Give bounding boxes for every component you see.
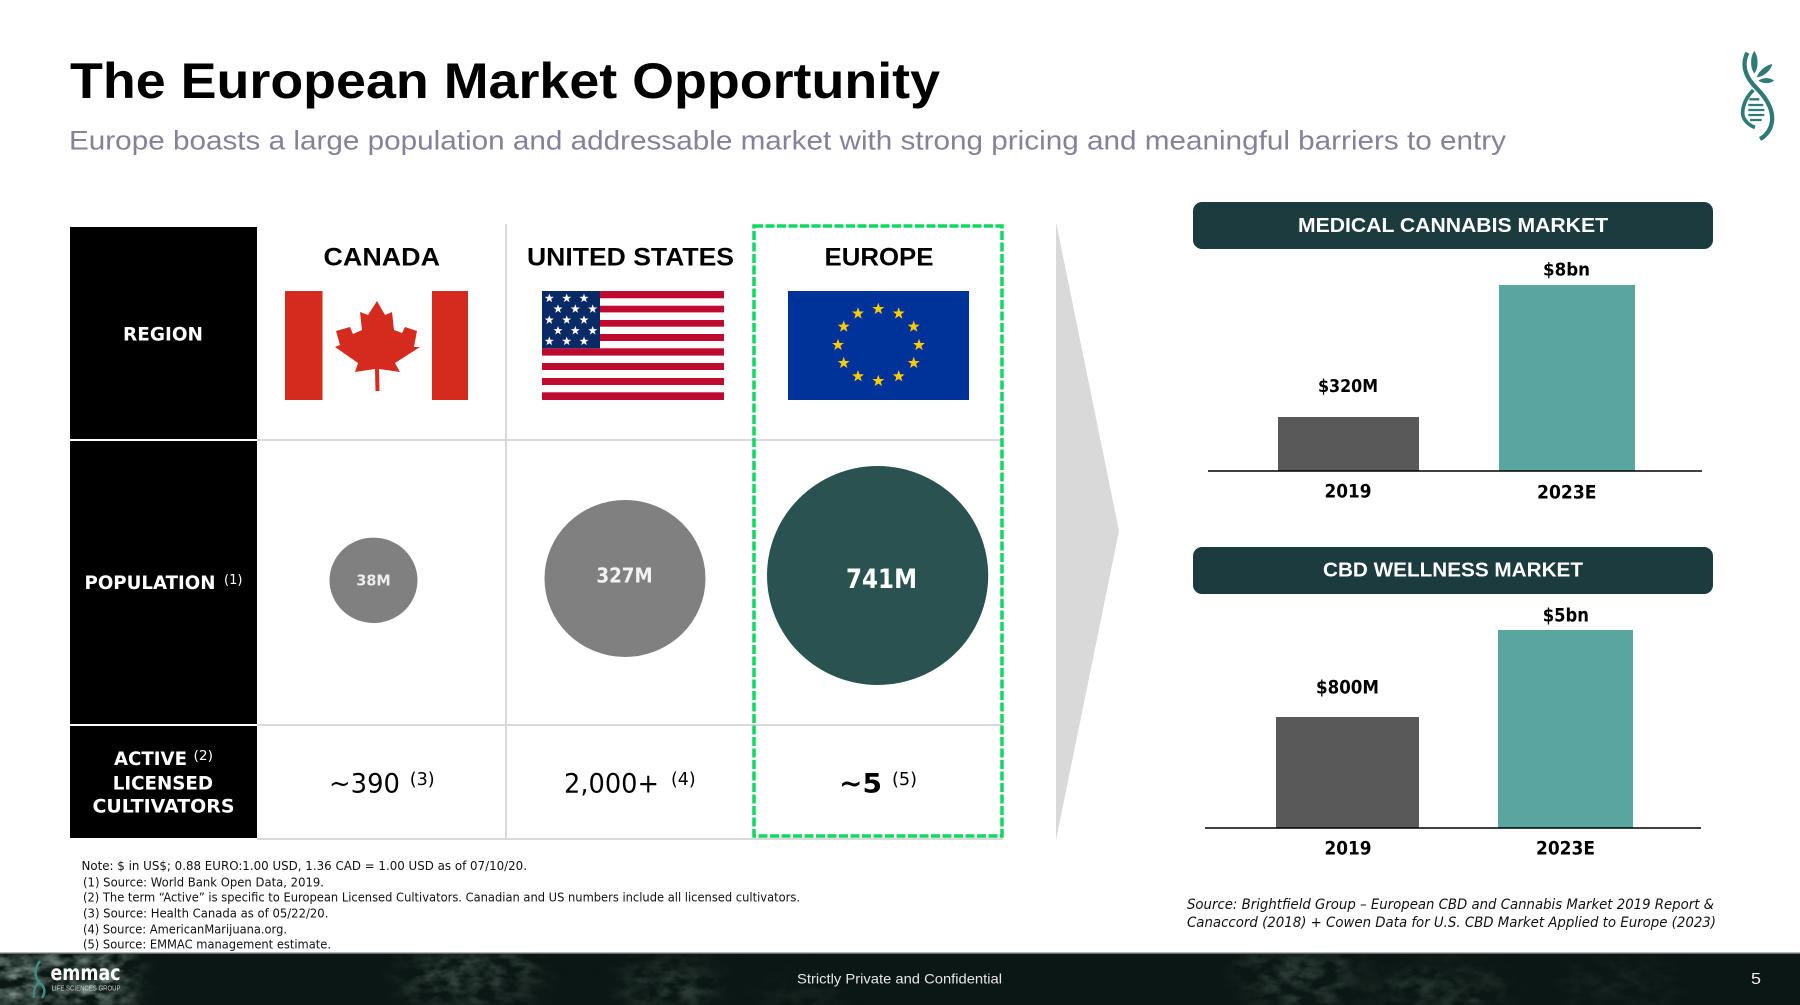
bubble: United States population xyxy=(544,500,706,657)
panel: comparison table xyxy=(70,224,1003,839)
bar chart: medical cannabis xyxy=(1208,260,1702,504)
value: Canada cultivators: ~390 xyxy=(329,769,400,800)
value: Canada cultivators: (3) xyxy=(410,769,435,790)
bubble: Europe population xyxy=(767,466,988,685)
bar chart: medical cannabis: 2023E xyxy=(1537,482,1596,504)
icon: European Union flag xyxy=(788,291,969,400)
row label: region: REGION xyxy=(123,324,203,346)
value: Europe cultivators: (5) xyxy=(892,769,917,790)
panel: CBD wellness market xyxy=(1193,547,1713,860)
footnotes: (4) Source: AmericanMarijuana.org. xyxy=(83,922,287,937)
page number: 5 xyxy=(1751,971,1761,988)
footnotes: (2) The term “Active” is specific to European Licensed Cultivators. Canadian and US numbers include all licensed cultivators. xyxy=(83,890,800,905)
heading: medical cannabis market: MEDICAL CANNABIS MARKET xyxy=(1298,215,1608,237)
icon: emmac DNA leaf logo xyxy=(1743,51,1774,139)
value: United States cultivators: 2,000+ xyxy=(564,769,659,800)
footer logo: emmac xyxy=(34,961,121,998)
source note: Source: Brightfield Group – European CBD and Cannabis Market 2019 Report & xyxy=(1187,897,1714,913)
bar chart: CBD wellness xyxy=(1205,605,1701,860)
heading: CBD wellness market: CBD WELLNESS MARKET xyxy=(1323,560,1583,582)
bar chart: medical cannabis: 2019 xyxy=(1324,480,1372,502)
bar chart: CBD wellness: $800M xyxy=(1316,677,1379,699)
footer band xyxy=(0,952,1800,1005)
row label: active licensed cultivators: CULTIVATORS xyxy=(92,795,234,817)
column heading: United States: UNITED STATES xyxy=(527,244,734,272)
row label: active licensed cultivators: LICENSED xyxy=(113,772,213,794)
row label: population: POPULATION xyxy=(84,572,216,594)
footnotes: (1) Source: World Bank Open Data, 2019. xyxy=(83,875,324,890)
arrow: grey chevron pointing to markets xyxy=(1056,222,1119,840)
row label: region xyxy=(70,227,257,439)
column heading: Europe: EUROPE xyxy=(824,244,934,272)
row label: population: (1) xyxy=(224,573,242,588)
icon: Canada flag xyxy=(285,291,468,400)
bubble: United States population: 327M xyxy=(596,563,653,587)
column heading: Canada: CANADA xyxy=(324,244,440,272)
footnotes: (5) Source: EMMAC management estimate. xyxy=(83,937,331,952)
bubble: Canada population xyxy=(330,538,418,623)
bubble: Canada population: 38M xyxy=(356,572,391,590)
icon: United States flag xyxy=(542,291,724,400)
footnotes: Note: $ in US$; 0.88 EURO:1.00 USD, 1.36 CAD = 1.00 USD as of 07/10/20. xyxy=(82,858,527,873)
value: Europe cultivators xyxy=(839,769,917,800)
footnotes xyxy=(82,858,800,952)
footer logo: emmac: LIFE SCIENCES GROUP xyxy=(52,986,121,993)
bar chart: medical cannabis: $320M xyxy=(1318,376,1378,397)
bar chart: CBD wellness: 2019 xyxy=(1324,838,1372,860)
source note: Canaccord (2018) + Cowen Data for U.S. CBD Market Applied to Europe (2023) xyxy=(1187,915,1716,931)
subtitle: Europe boasts a large population and addressable market with strong pricing and meaningful barriers to entry xyxy=(69,126,1507,156)
footer logo: emmac: emmac xyxy=(50,961,120,985)
bubble: Europe population: 741M xyxy=(846,564,917,595)
panel: medical cannabis market xyxy=(1193,202,1713,504)
source note xyxy=(1187,897,1716,931)
row label: population xyxy=(70,441,257,724)
heading: medical cannabis market xyxy=(1193,202,1713,249)
footnotes: (3) Source: Health Canada as of 05/22/20. xyxy=(83,906,328,921)
value: United States cultivators: (4) xyxy=(671,769,696,790)
bar chart: CBD wellness: 2023E xyxy=(1536,838,1595,860)
bar chart: medical cannabis: $8bn xyxy=(1543,260,1590,280)
row label: active licensed cultivators xyxy=(70,726,257,838)
row label: active licensed cultivators: ACTIVE xyxy=(114,748,187,770)
row label: active licensed cultivators: (2) xyxy=(194,749,213,764)
highlight: Europe dashed outline xyxy=(754,226,1002,836)
bar chart: CBD wellness: $5bn xyxy=(1543,605,1589,627)
heading: CBD wellness market xyxy=(1193,547,1713,594)
footer confidentiality text: Strictly Private and Confidential xyxy=(797,970,1002,986)
value: Europe cultivators: ~5 xyxy=(839,769,882,800)
title: The European Market Opportunity xyxy=(70,53,940,109)
